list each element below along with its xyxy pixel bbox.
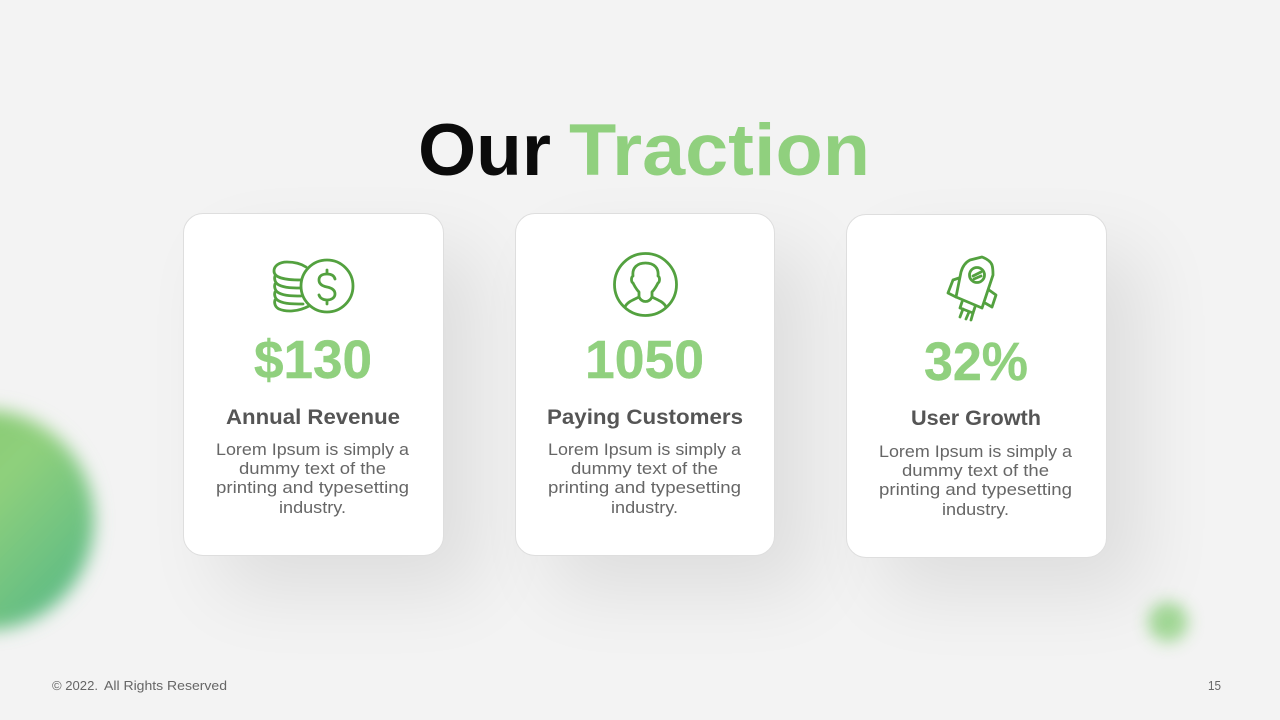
- metric: 32%: [924, 332, 1028, 392]
- icon: rocket: [948, 257, 996, 320]
- card content: annual revenue: [216, 260, 410, 517]
- text block: dummy text of the: [239, 459, 386, 478]
- text block: printing and typesetting: [879, 480, 1072, 499]
- panel: annual revenue card background: [183, 213, 444, 556]
- text block: printing and typesetting: [216, 478, 409, 497]
- panel: paying customers card background: [515, 213, 775, 556]
- decorative blob: left: [0, 398, 107, 642]
- text block: industry.: [942, 500, 1009, 519]
- footer copyright: © 2022.: [52, 678, 98, 693]
- metric: $130: [254, 330, 372, 390]
- text block: Lorem Ipsum is simply a: [216, 440, 410, 459]
- heading: User Growth: [911, 407, 1041, 430]
- text block: printing and typesetting: [548, 478, 741, 497]
- heading: Paying Customers: [547, 406, 743, 429]
- text block: dummy text of the: [902, 461, 1049, 480]
- text block: [548, 440, 742, 517]
- heading: Annual Revenue: [226, 406, 400, 429]
- metric: 1050: [585, 330, 704, 390]
- card content: user growth: [879, 257, 1073, 519]
- text block: [216, 440, 410, 517]
- title: Traction: [569, 110, 870, 191]
- decorative blob: right: [1148, 602, 1188, 642]
- text block: [879, 442, 1073, 519]
- footer copyright: [52, 678, 227, 693]
- icon: person: [614, 254, 676, 316]
- title: [418, 110, 870, 191]
- icon: coins: [274, 260, 353, 312]
- footer copyright: All Rights Reserved: [104, 678, 227, 693]
- title: Our: [418, 110, 551, 191]
- panel: user growth card background: [846, 214, 1107, 558]
- text block: Lorem Ipsum is simply a: [548, 440, 742, 459]
- text block: industry.: [279, 498, 346, 517]
- card content: paying customers: [547, 254, 743, 517]
- text block: industry.: [611, 498, 678, 517]
- text block: Lorem Ipsum is simply a: [879, 442, 1073, 461]
- page number: 15: [1208, 678, 1221, 693]
- text block: dummy text of the: [571, 459, 718, 478]
